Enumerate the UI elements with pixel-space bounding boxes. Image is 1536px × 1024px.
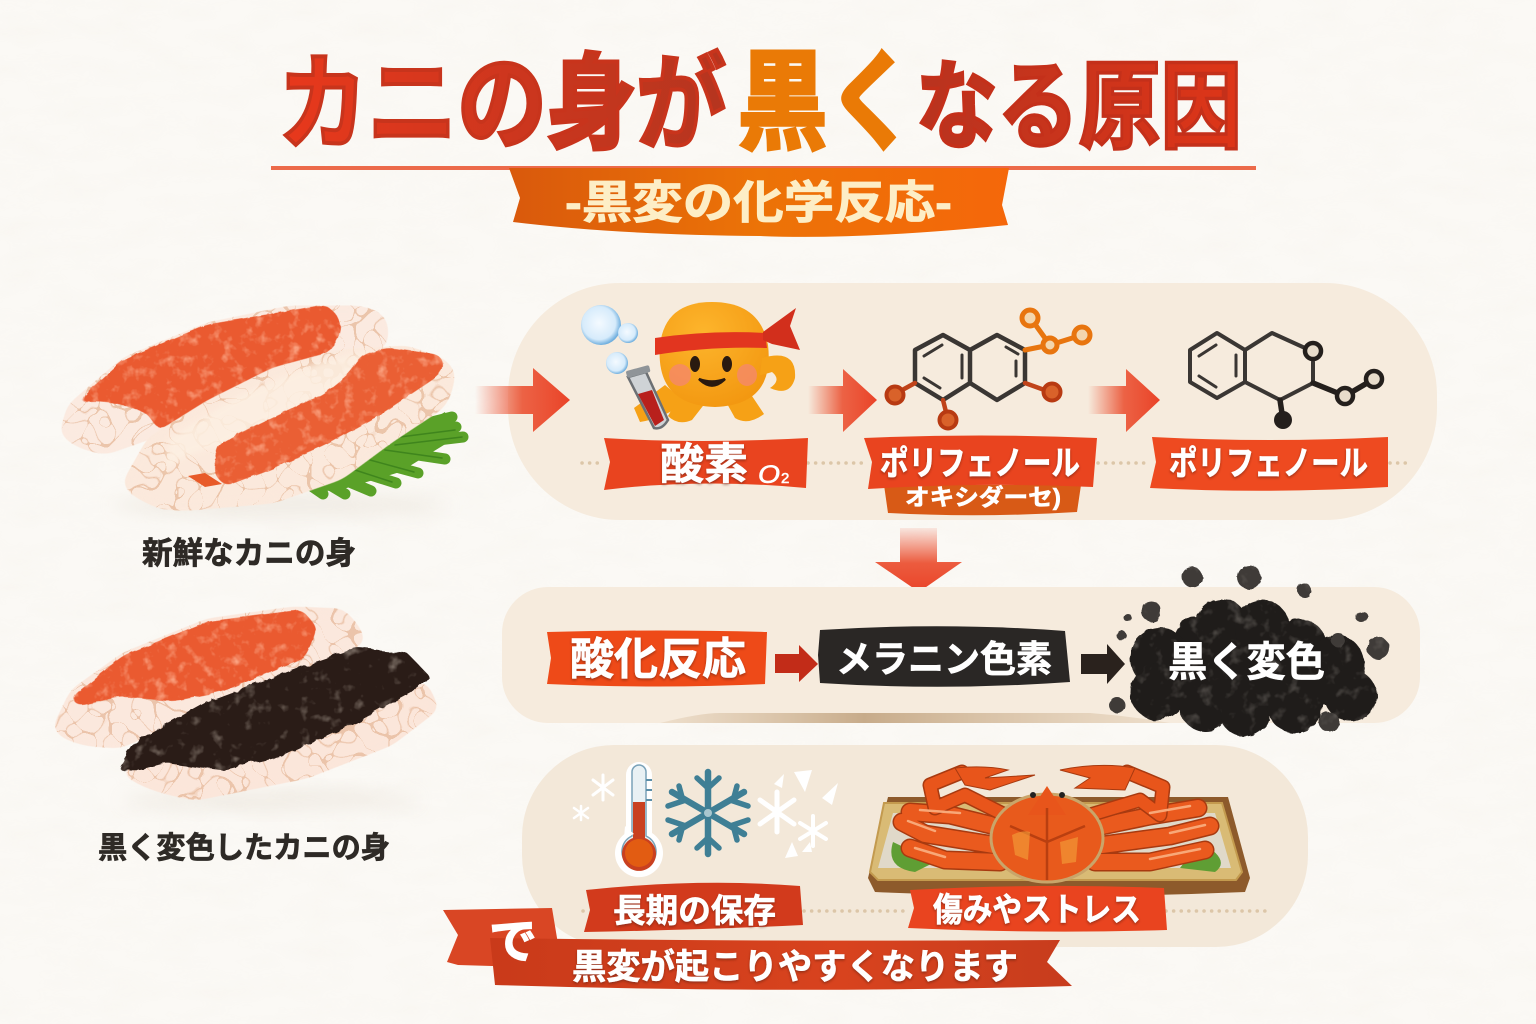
bottom banner: 黒変が起こりやすくなります — [572, 948, 1018, 987]
label: damage and stress: 傷みやストレス — [933, 891, 1141, 928]
fresh crab sushi — [60, 305, 463, 517]
label: melanin pigment — [818, 626, 1070, 687]
molecule: polyphenol with oxidase — [886, 310, 1090, 428]
label: oxidation reaction: 酸化反応 — [570, 635, 746, 684]
dotted connector — [582, 461, 1412, 465]
molecule: polyphenol — [1190, 333, 1382, 429]
crab legs and claws — [902, 772, 1210, 862]
back crab piece — [53, 607, 365, 748]
subtitle ribbon — [509, 168, 1009, 237]
panel: reaction — [502, 565, 1420, 737]
black blot: 黒く変色 — [1168, 639, 1325, 685]
crab shell — [991, 794, 1103, 882]
title: カニの身が — [278, 47, 726, 163]
bottom banner: で — [489, 916, 537, 969]
label: polyphenol oxidase: ポリフェノール — [880, 445, 1080, 483]
label: blackened crab: 黒く変色したカニの身 — [98, 832, 390, 865]
bottom banner — [443, 908, 1072, 990]
title: 黒く — [738, 42, 916, 163]
label: fresh crab: 新鮮なカニの身 — [142, 536, 356, 571]
label: oxygen: 2 — [781, 470, 789, 487]
panel: risk factors — [522, 745, 1308, 947]
blackened crab sushi — [53, 607, 439, 810]
label: long storage — [584, 883, 803, 932]
title rule — [271, 166, 1256, 170]
icon: snowflake — [668, 772, 748, 854]
panel: oxidation inputs — [508, 283, 1437, 520]
arrow — [808, 369, 877, 432]
shiso leaf — [310, 412, 463, 494]
icon: crab on tray — [868, 765, 1250, 896]
label: long storage: 長期の保存 — [613, 892, 776, 929]
icon: thermometer — [615, 762, 663, 877]
arrow — [775, 645, 818, 682]
label: polyphenol oxidase — [864, 436, 1097, 515]
label: oxygen: 酸素 — [660, 441, 748, 489]
label: melanin pigment: メラニン色素 — [836, 639, 1052, 680]
label: polyphenol: ポリフェノール — [1169, 445, 1368, 483]
arrow — [1081, 644, 1125, 684]
title: なる原因 — [916, 54, 1242, 161]
label: polyphenol — [1150, 437, 1388, 491]
arrow — [1088, 369, 1160, 432]
black blot — [1109, 565, 1389, 737]
label: polyphenol oxidase: オキシダーセ) — [905, 484, 1061, 510]
arrow: down — [875, 528, 962, 592]
front crab piece — [123, 346, 455, 510]
label: oxygen: O — [758, 461, 780, 489]
icon: oxygen mascot — [581, 302, 800, 428]
arrow: crab to oxidation — [475, 368, 570, 432]
back crab piece — [60, 306, 388, 454]
subtitle ribbon: -黒変の化学反応- — [565, 177, 952, 228]
dotted connector — [583, 909, 1272, 913]
crab pincers — [955, 765, 1135, 790]
icon: snow sparkles — [574, 770, 838, 858]
front crab piece — [121, 683, 439, 800]
title — [278, 42, 1242, 163]
label: oxygen — [604, 438, 808, 490]
